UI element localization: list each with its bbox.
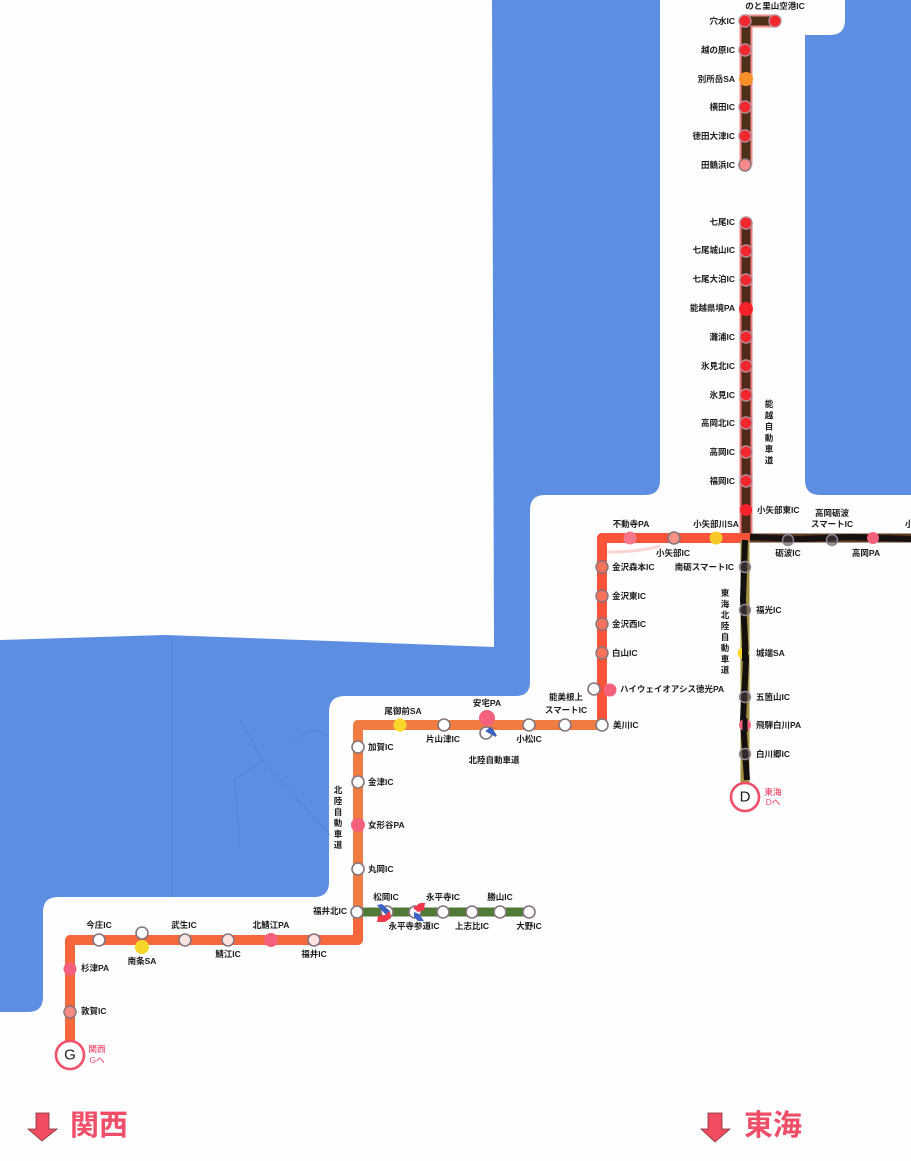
- route label: 能越自動車道: 車: [765, 444, 774, 454]
- station: 福岡IC: 福岡IC: [709, 476, 735, 486]
- station: 白川郷IC: [740, 748, 790, 760]
- station: 安宅PA: 安宅PA: [473, 698, 501, 708]
- stations: east branch: [775, 508, 911, 558]
- station: 金沢西IC: [596, 618, 646, 630]
- station: 能美根上スマートIC: 能美根上: [549, 692, 583, 702]
- route label: 能越自動車道: 道: [765, 456, 774, 466]
- station: 氷見IC: 氷見IC: [709, 390, 735, 400]
- route: Chubu Jukan green section: [358, 908, 529, 916]
- station: 氷見北IC: 氷見北IC: [701, 361, 735, 371]
- station: 田鶴浜IC: 田鶴浜IC: [701, 160, 735, 170]
- route label: 東海北陸自動車道: 北: [721, 610, 730, 620]
- station: 金津IC: [352, 776, 394, 788]
- station: 武生IC: 武生IC: [171, 920, 197, 930]
- station: 鯖江IC: 鯖江IC: [215, 949, 241, 959]
- station: 北鯖江PA: [253, 920, 289, 947]
- route label: 北陸自動車道 vertical: 車: [334, 829, 343, 839]
- station: 高岡砺波スマートIC: スマートIC: [811, 519, 853, 529]
- station: 横田IC: [709, 101, 751, 113]
- station: 氷見IC: [709, 389, 752, 401]
- route: Hokuriku orange section: [358, 725, 602, 911]
- icon: arrow to Tokai: [701, 1113, 730, 1142]
- station: 能越県境PA: 能越県境PA: [690, 303, 735, 313]
- station: 徳田大津IC: [692, 130, 751, 142]
- station: 福光IC: 福光IC: [756, 605, 782, 615]
- station: 小矢部IC: 小矢部IC: [656, 548, 690, 558]
- station: 七尾城山IC: [692, 245, 752, 257]
- station: 南条SA: 南条SA: [128, 956, 156, 966]
- station: 城端SA: 城端SA: [756, 648, 785, 658]
- station: 別所岳SA: [698, 72, 753, 86]
- station: 砺波IC: 砺波IC: [775, 548, 801, 558]
- station: 福井IC: [301, 934, 327, 959]
- station: 大野IC: [516, 906, 542, 931]
- route label: 能越自動車道: 動: [765, 433, 774, 443]
- station: 松岡IC: [373, 892, 399, 922]
- route: Hokuriku expressway: [70, 538, 746, 1042]
- route label: 東海北陸自動車道: 道: [721, 665, 730, 675]
- route label: 北陸自動車道 vertical: 動: [334, 818, 343, 828]
- station: のと里山空港IC: [745, 1, 805, 27]
- icon: arrow to Kansai: [28, 1113, 57, 1141]
- stations: Hokuriku vertical, Kanazawa: [588, 561, 724, 731]
- station: 金沢西IC: 金沢西IC: [612, 619, 646, 629]
- station: ハイウェイオアシス徳光PA: ハイウェイオアシス徳光PA: [620, 684, 724, 694]
- panel: sea, central and lower left: [0, 0, 660, 1012]
- route: Noetsu east branch: [750, 537, 911, 539]
- station: 女形谷PA: [351, 818, 405, 832]
- station: 能美根上スマートIC: [545, 692, 587, 731]
- station: 田鶴浜IC: [701, 159, 751, 171]
- station: 永平寺IC: [426, 892, 460, 918]
- station: 不動寺PA: 不動寺PA: [613, 519, 649, 529]
- station: 氷見北IC: [701, 360, 752, 372]
- station: 永平寺IC: 永平寺IC: [426, 892, 460, 902]
- station: 女形谷PA: 女形谷PA: [368, 820, 405, 830]
- station: 今庄IC: [86, 920, 112, 946]
- station: 徳田大津IC: 徳田大津IC: [692, 131, 735, 141]
- station: 安宅PA: [473, 698, 501, 739]
- station: 横田IC: 横田IC: [709, 102, 735, 112]
- terminus: D circle: D: [740, 788, 751, 806]
- station: 今庄IC: 今庄IC: [86, 920, 112, 930]
- station: 白山IC: [596, 647, 638, 659]
- station: 福井IC: 福井IC: [301, 949, 327, 959]
- station: 穴水IC: 穴水IC: [709, 16, 735, 26]
- station: 能越県境PA: [690, 302, 753, 316]
- station: ハイウェイオアシス徳光PA: [588, 683, 724, 696]
- stations: Noto north: [692, 1, 805, 171]
- route label: 能越自動車道: 自: [765, 422, 773, 432]
- station: 片山津IC: 片山津IC: [426, 734, 460, 744]
- station: 越の原IC: 越の原IC: [701, 45, 735, 55]
- route label: 北陸自動車道 horizontal: 北陸自動車道: [468, 755, 520, 765]
- station: 加賀IC: [352, 741, 394, 753]
- terminus: G circle: [56, 1041, 84, 1069]
- station: 福井北IC: 福井北IC: [313, 906, 347, 916]
- station: 勝山IC: [487, 892, 513, 918]
- route label: 北陸自動車道 vertical: 道: [334, 840, 343, 850]
- station: 杉津PA: [64, 962, 109, 976]
- station: 丸岡IC: 丸岡IC: [368, 864, 394, 874]
- station: 七尾城山IC: 七尾城山IC: [692, 245, 735, 255]
- station: 灘浦IC: 灘浦IC: [709, 332, 735, 342]
- station: 高岡IC: [709, 446, 752, 458]
- station: 永平寺参道IC: 永平寺参道IC: [388, 921, 440, 931]
- station: 五箇山IC: 五箇山IC: [756, 692, 790, 702]
- terminus: G circle: G: [64, 1046, 76, 1064]
- station: 能美根上スマートIC: スマートIC: [545, 705, 587, 715]
- station: 武生IC: [171, 920, 197, 946]
- station: 飛騨白川PA: [739, 718, 801, 732]
- station: 別所岳SA: 別所岳SA: [698, 74, 735, 84]
- route label: 東海北陸自動車道: 東: [721, 588, 730, 598]
- station: 高岡砺波スマートIC: [811, 508, 853, 546]
- station: 穴水IC: [709, 15, 751, 27]
- station: 上志比IC: 上志比IC: [455, 921, 489, 931]
- heading: 東海: 東海: [744, 1109, 802, 1142]
- route label: 能越自動車道: 能: [765, 399, 774, 409]
- station: 城端SA: [738, 645, 785, 661]
- station: 小矢部東IC: 小矢部東IC: [757, 505, 800, 515]
- route label: 北陸自動車道 vertical: 陸: [334, 796, 343, 806]
- station: 杉津PA: 杉津PA: [81, 963, 109, 973]
- station: 七尾大泊IC: [692, 274, 752, 286]
- station: 越の原IC: [701, 44, 751, 56]
- station: 高岡砺波スマートIC: 高岡砺波: [815, 508, 849, 518]
- station: 敦賀IC: 敦賀IC: [81, 1006, 107, 1016]
- station: 南砺スマートIC: 南砺スマートIC: [675, 562, 734, 572]
- route: Hokuriku red section: [602, 538, 750, 722]
- station: 高岡北IC: [701, 417, 752, 429]
- station: 南条SA: [128, 927, 156, 966]
- station: 尾御前SA: 尾御前SA: [384, 706, 422, 716]
- station: 高岡北IC: 高岡北IC: [701, 418, 735, 428]
- station: 金沢東IC: 金沢東IC: [612, 591, 646, 601]
- station: 永平寺参道IC: [388, 903, 440, 931]
- station: 高岡PA: 高岡PA: [852, 548, 880, 558]
- route label: 北陸自動車道 vertical: 北: [334, 785, 343, 795]
- station: 福井北IC: [313, 906, 363, 918]
- station: 小矢部川SA: 小矢部川SA: [693, 519, 739, 529]
- route: Tokai-Hokuriku expressway: [743, 540, 747, 783]
- route: Noto north section: [746, 21, 775, 165]
- station: 大野IC: 大野IC: [516, 921, 542, 931]
- station: 七尾IC: [709, 217, 752, 229]
- station: 金沢森本IC: [596, 561, 655, 573]
- station: 小矢部東IC: [740, 504, 800, 516]
- heading: 関西: 関西: [70, 1110, 128, 1142]
- station: 五箇山IC: [740, 692, 790, 702]
- terminus label: 東海 Dへ: 東海: [764, 786, 782, 797]
- station: 美川IC: [596, 719, 639, 731]
- station: 灘浦IC: [709, 331, 752, 343]
- terminus: D circle: [731, 783, 759, 811]
- station: のと里山空港IC: のと里山空港IC: [745, 1, 805, 11]
- route label: 能越自動車道: 越: [765, 410, 774, 420]
- station: 七尾IC: 七尾IC: [709, 217, 735, 227]
- station: 敦賀IC: [64, 1006, 107, 1018]
- route label: 東海北陸自動車道: 自: [721, 632, 729, 642]
- station: 白山IC: 白山IC: [612, 648, 638, 658]
- station: 松岡IC: 松岡IC: [373, 892, 399, 902]
- station: 美川IC: 美川IC: [613, 720, 639, 730]
- terminus label: 東海 Dへ: [764, 786, 782, 807]
- terminus label: 関西 Gへ: [88, 1044, 106, 1065]
- station: 高岡IC: 高岡IC: [709, 447, 735, 457]
- terminus label: 東海 Dへ: Dへ: [766, 797, 781, 807]
- station: 金沢東IC: [596, 590, 646, 602]
- station: 丸岡IC: [352, 863, 394, 875]
- station: 加賀IC: 加賀IC: [368, 742, 394, 752]
- station: 北鯖江PA: 北鯖江PA: [253, 920, 289, 930]
- station: 鯖江IC: [215, 934, 241, 959]
- stations: Hokuriku upper horizontal: [613, 519, 739, 558]
- station: 上志比IC: [455, 906, 489, 931]
- stations: Hokuriku middle horizontal: [384, 692, 587, 744]
- route label: 東海北陸自動車道: 陸: [721, 621, 730, 631]
- stations: Hokuriku Fukui vertical: [313, 741, 405, 918]
- stations: Noto south: [690, 217, 800, 516]
- station: 小松IC: [516, 719, 542, 744]
- station: 飛騨白川PA: 飛騨白川PA: [756, 720, 801, 730]
- station: 小松IC: 小松IC: [516, 734, 542, 744]
- stations: Tokai-Hokuriku: [675, 562, 801, 760]
- station: 福光IC: [740, 604, 782, 616]
- route label: 東海北陸自動車道: 動: [721, 643, 730, 653]
- station: 金沢森本IC: 金沢森本IC: [612, 562, 655, 572]
- station: 片山津IC: [426, 719, 460, 744]
- terminus label: 関西 Gへ: 関西: [88, 1044, 106, 1054]
- stations: Hokuriku lower horizontal: [64, 920, 327, 1018]
- terminus label: 関西 Gへ: Gへ: [89, 1055, 105, 1065]
- route label: 北陸自動車道 vertical: 自: [334, 807, 342, 817]
- station: 尾御前SA: [384, 706, 422, 732]
- route label: 東海北陸自動車道: 海: [721, 599, 730, 609]
- station: 七尾大泊IC: 七尾大泊IC: [692, 274, 735, 284]
- route label: 東海北陸自動車道: 車: [721, 654, 730, 664]
- station: 勝山IC: 勝山IC: [487, 892, 513, 902]
- panel: sea, right: [805, 0, 911, 495]
- station: 金津IC: 金津IC: [368, 777, 394, 787]
- station: 白川郷IC: 白川郷IC: [756, 749, 790, 759]
- station: 福岡IC: [709, 475, 752, 487]
- route: Noto south section: [740, 223, 752, 538]
- stations: Chubu Jukan: [373, 892, 542, 931]
